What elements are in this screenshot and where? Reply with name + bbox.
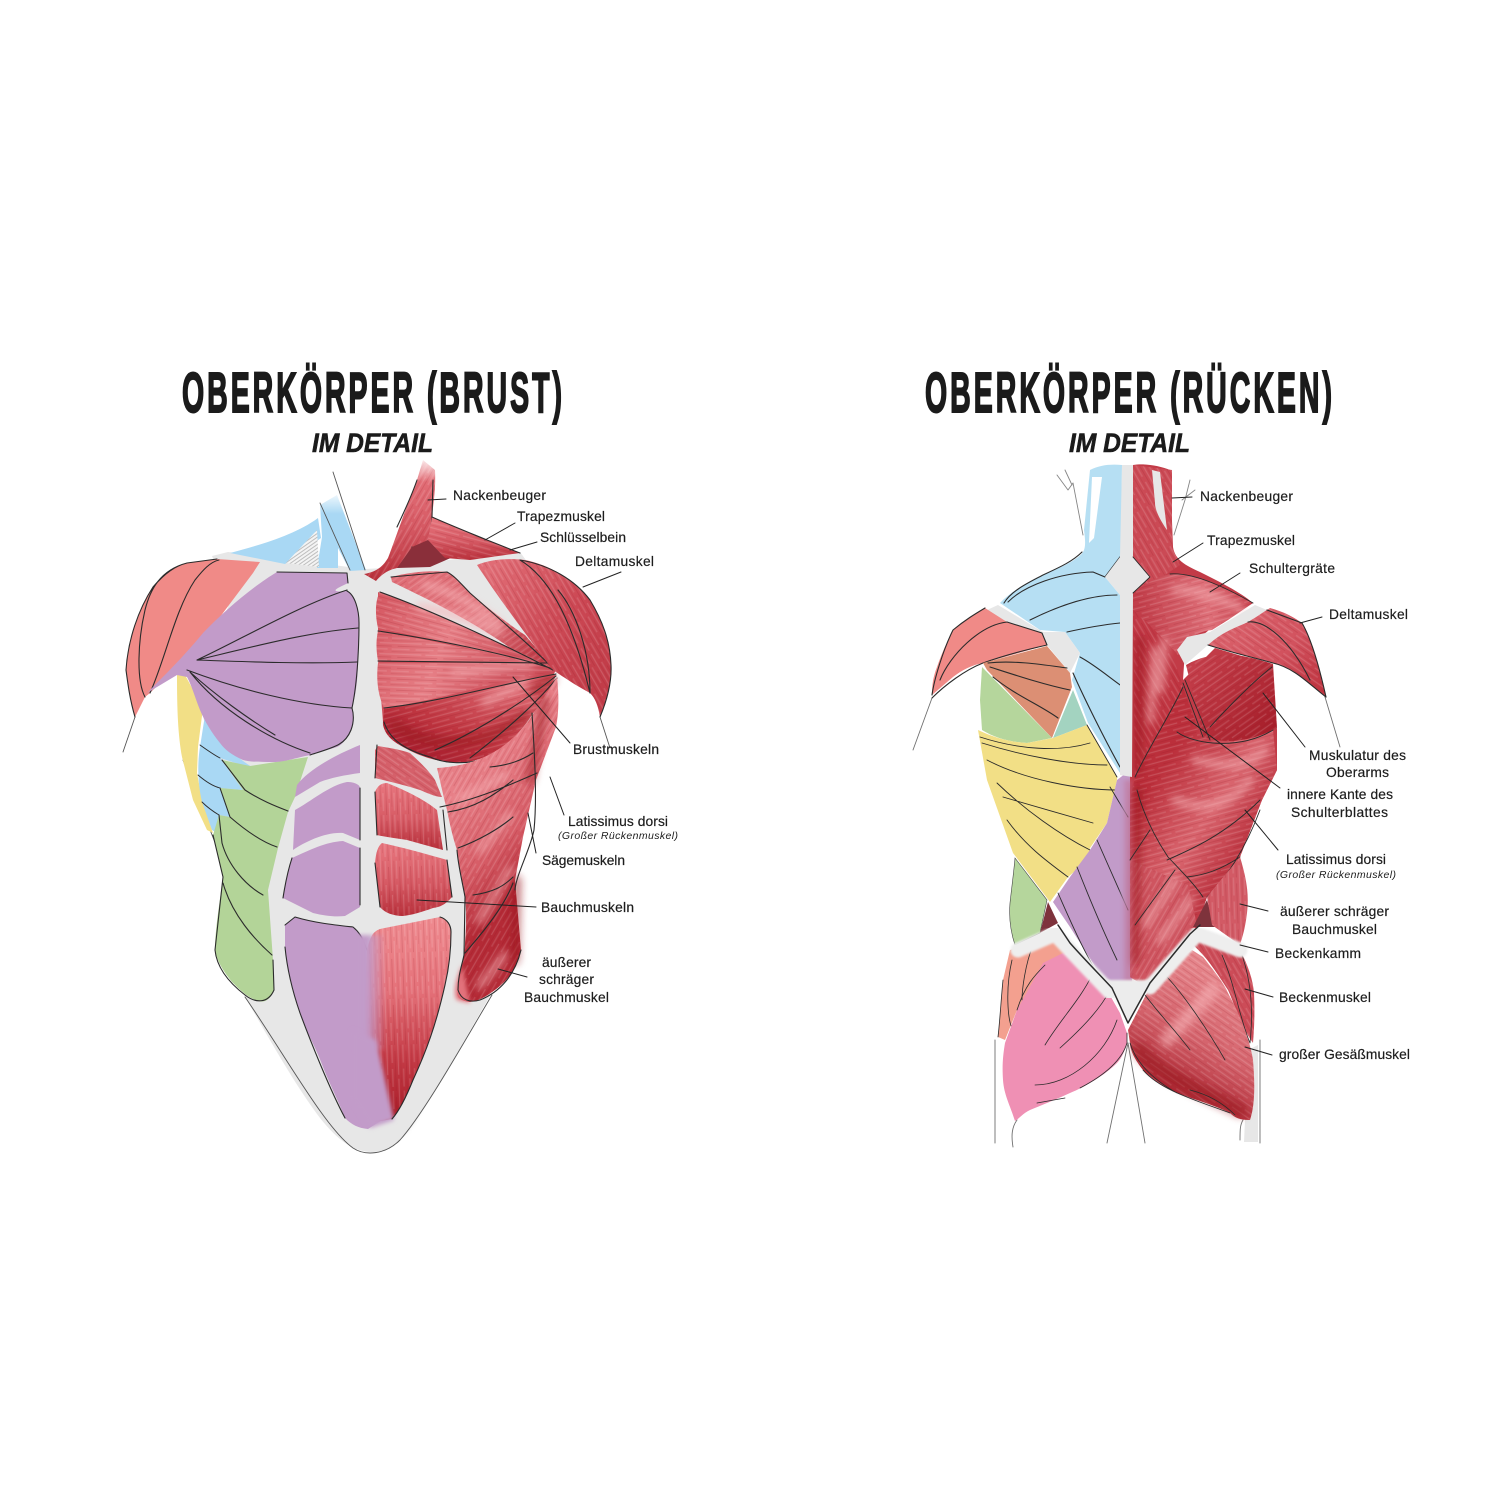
subtitle: chest: IM DETAIL: [312, 428, 433, 458]
label: Trapezmuskel: Trapezmuskel: [1207, 533, 1295, 548]
leg grey: [1244, 1045, 1258, 1142]
main back muscles: right red: [1130, 464, 1277, 987]
external oblique: back right: [1207, 857, 1248, 945]
pectoral: right red: [376, 571, 557, 763]
label: Muskulatur des Oberarms: Muskulatur des: [1309, 748, 1406, 763]
fascia: purple: [1053, 770, 1132, 990]
scapula: right grey: [1177, 605, 1267, 665]
spine: grey: [1105, 465, 1150, 777]
label: innere Kante des Schulterblattes: innere Kante des: [1287, 787, 1393, 802]
spine to fascia blend: [1122, 780, 1136, 985]
label: Beckenmuskel: Beckenmuskel: [1279, 990, 1371, 1005]
label: äußerer schräger Bauchmuskel: [1240, 904, 1389, 937]
back detail lines: right red: [1130, 557, 1273, 925]
pectoral: left purple: [147, 572, 359, 762]
label: Schlüsselbein: Schlüsselbein: [540, 530, 626, 545]
label: äußerer schräger Bauchmuskel: [498, 955, 609, 1005]
serratus: blue: [198, 715, 252, 835]
label: Deltamuskel: [575, 554, 654, 587]
trapezius: right: [428, 517, 520, 560]
label: Latissimus dorsi: [550, 777, 678, 842]
label: Deltamuskel: Deltamuskel: [575, 554, 654, 569]
abdominals: left purple: [283, 745, 385, 1129]
label: äußerer schräger Bauchmuskel: schräger: [539, 972, 594, 987]
label: Bauchmuskeln: [417, 900, 634, 915]
deltoid: left: [932, 608, 1047, 698]
body outline: chest: [123, 472, 610, 1153]
label: Trapezmuskel: [1173, 533, 1295, 562]
label: Deltamuskel: Deltamuskel: [1329, 607, 1408, 622]
body base: chest: [200, 552, 555, 1152]
panel: upper body chest: [123, 360, 678, 1153]
label: Beckenkamm: [1240, 945, 1361, 961]
label: äußerer schräger Bauchmuskel: Bauchmuskel: [524, 990, 609, 1005]
label: Brustmuskeln: Brustmuskeln: [573, 742, 659, 757]
label: Sägemuskeln: Sägemuskeln: [542, 853, 625, 868]
label: Latissimus dorsi: [1245, 810, 1396, 881]
title: chest: OBERKÖRPER (BRUST): [182, 360, 562, 425]
body lines: arms and legs: [913, 697, 1340, 1147]
maroon gap: left: [1040, 902, 1058, 933]
neck muscle: left blue: [317, 495, 366, 571]
panel: upper body back: [913, 360, 1410, 1147]
label: großer Gesäßmuskel: großer Gesäßmuskel: [1279, 1047, 1410, 1062]
neck flexor: right: [364, 456, 440, 581]
external oblique: right red: [437, 677, 558, 1003]
label: Schlüsselbein: [510, 530, 626, 550]
deltoid: right back: [1208, 608, 1326, 697]
maroon gap: right: [1193, 900, 1215, 927]
label: Brustmuskeln: [513, 677, 659, 757]
infraspinatus: orange: [983, 646, 1072, 738]
scapula: left grey: [987, 605, 1080, 673]
label: Sägemuskeln: [528, 813, 625, 868]
label: Nackenbeuger: Nackenbeuger: [1200, 489, 1293, 504]
gluteus medius: right: [1193, 937, 1254, 1043]
label: Latissimus dorsi: (Großer Rückenmuskel): [558, 830, 678, 842]
trapezius: left blue: [1000, 465, 1123, 773]
neck gap dark: [397, 540, 453, 568]
label: Latissimus dorsi: Latissimus dorsi: [568, 814, 668, 829]
iliac crest: grey: [1018, 925, 1240, 1023]
label: Beckenkamm: Beckenkamm: [1275, 946, 1361, 961]
label: Trapezmuskel: Trapezmuskel: [517, 509, 605, 524]
label: Schultergräte: [1210, 561, 1335, 592]
teres: green: [980, 667, 1052, 743]
latissimus: yellow: [978, 725, 1117, 902]
label: Schultergräte: Schultergräte: [1249, 561, 1335, 576]
neck stripe: grey: [1152, 470, 1167, 530]
lower back left: green: [1010, 858, 1047, 945]
label: Trapezmuskel: [485, 509, 605, 540]
neck sketch lines: [1057, 470, 1195, 535]
label: äußerer schräger Bauchmuskel: Bauchmuskel: [1292, 922, 1377, 937]
gluteus maximus: left pink: [1003, 953, 1127, 1121]
teres: teal: [1053, 690, 1087, 738]
fade: left neck top: [316, 490, 346, 514]
subtitle: back: IM DETAIL: [1069, 428, 1190, 458]
title: back: OBERKÖRPER (RÜCKEN): [925, 360, 1332, 425]
shadow under torso: [380, 1003, 472, 1140]
deltoid: right: [477, 559, 611, 717]
label: äußerer schräger Bauchmuskel: äußerer: [542, 955, 591, 970]
label: Bauchmuskeln: Bauchmuskeln: [541, 900, 634, 915]
label: äußerer schräger Bauchmuskel: äußerer schräger: [1280, 904, 1389, 919]
gluteus medius: left: [998, 935, 1067, 1040]
label: Latissimus dorsi: Latissimus dorsi: [1286, 852, 1386, 867]
yellow side muscle: [177, 675, 213, 833]
label: innere Kante des Schulterblattes: Schulterblattes: [1291, 805, 1388, 820]
hatched neck area: [286, 530, 319, 567]
label: Muskulatur des Oberarms: [1263, 693, 1406, 780]
label: Beckenmuskel: [1245, 989, 1371, 1005]
label: Deltamuskel: [1300, 607, 1408, 623]
oblique: green: [213, 757, 308, 1002]
deltoid: left: [126, 559, 260, 717]
label: Muskulatur des Oberarms: Oberarms: [1326, 765, 1389, 780]
abdominals: right red: [352, 745, 452, 1128]
label: Latissimus dorsi: (Großer Rückenmuskel): [1276, 869, 1396, 881]
gluteus maximus: right: [1128, 950, 1254, 1120]
label: innere Kante des Schulterblattes: [1185, 717, 1393, 820]
label: Nackenbeuger: Nackenbeuger: [453, 488, 546, 503]
trapezius: left blue: [230, 518, 321, 564]
